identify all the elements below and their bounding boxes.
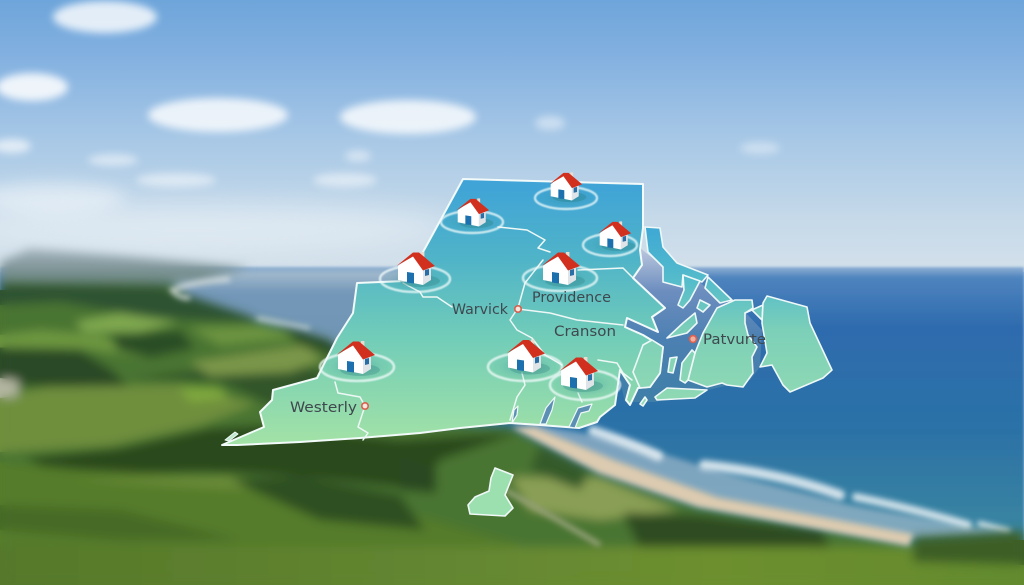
river lines (335, 227, 632, 440)
marker: house southwest (320, 341, 394, 381)
marker: house south (488, 340, 562, 381)
background: clouds (0, 1, 780, 252)
background: surf lines (593, 431, 1008, 531)
east neck (645, 227, 708, 287)
background: hazy bay on the left (160, 270, 560, 420)
marker: house west (380, 252, 450, 292)
background: coastal hills and fields (0, 249, 1024, 585)
marker: house northeast (583, 221, 637, 256)
southern blue inlets (512, 397, 592, 428)
map of the state (222, 179, 832, 516)
small western island (225, 432, 238, 441)
label: Warvick: Warvick (452, 302, 509, 318)
background: canvas-edge fill for the hills (0, 290, 1024, 585)
background: sky (0, 0, 1024, 272)
marker: house southeast (550, 357, 620, 400)
bay water (618, 248, 762, 402)
background: ocean (0, 267, 1024, 567)
label: Providence: Providence (532, 290, 611, 306)
marker: house northwest (441, 198, 503, 233)
background: hillside path (505, 490, 600, 545)
marker: house north (535, 172, 597, 209)
label: Westerly: Westerly (290, 400, 357, 416)
label: Cranson: Cranson (554, 324, 616, 340)
background: shallow water along beach (510, 420, 1012, 540)
bay islands (633, 275, 832, 406)
label: Patvurte: Patvurte (703, 332, 766, 348)
marker: house Providence (523, 252, 597, 291)
mainland (222, 179, 665, 445)
Block Island (468, 468, 513, 516)
background: beaches (172, 279, 913, 546)
